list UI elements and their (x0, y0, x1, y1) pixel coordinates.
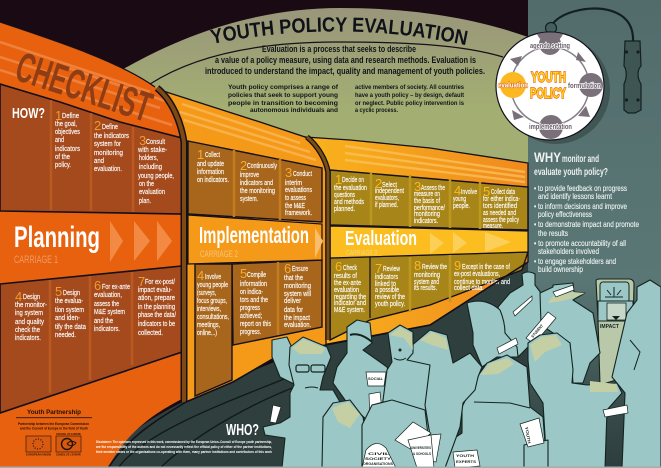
implementation steps lower: online...) (197, 328, 217, 337)
train bottom edge lines (108, 262, 528, 468)
evaluation steps lower: the ex-ante (334, 278, 361, 287)
dome with introduction (124, 8, 528, 162)
evaluation definition (205, 44, 485, 76)
evaluation steps upper: monitoring (414, 209, 440, 218)
implementation steps lower: tors and the (240, 295, 268, 304)
evaluation steps lower: 7 (375, 261, 382, 276)
implementation steps lower: that the (284, 273, 303, 282)
evaluation steps lower: continue to monitor and (454, 277, 510, 286)
youth policy text right column: active members of society. All countries (355, 84, 464, 91)
wire and plug (551, 9, 641, 113)
evaluation steps lower: system and (414, 277, 439, 286)
lower windows (330, 252, 528, 340)
planning steps lower: evaluation, (94, 290, 122, 299)
person: blond man (528, 333, 628, 468)
why panel: WHY (534, 149, 562, 165)
evaluation steps upper: assess the policy (483, 215, 519, 224)
planning steps upper: and (94, 156, 104, 165)
person: woman in boater hat: STUDENT (530, 323, 544, 339)
implementation steps lower: Ensure (292, 264, 308, 273)
person: backpack man (333, 320, 390, 420)
person: front hooded figure with backpack: EXPERTS (456, 459, 476, 464)
divider between carriages 1 and 2 (157, 88, 184, 402)
youth policy centre label: YOUTH (531, 69, 566, 86)
policy cycle diagram (496, 9, 641, 144)
planning steps lower: 6 (94, 278, 101, 293)
evaluation steps upper: tors identified (483, 201, 517, 210)
person: front woman with tote and papers (362, 400, 434, 468)
evaluation steps upper: questions (334, 190, 355, 199)
implementation steps upper: on indicators. (197, 175, 229, 184)
person: backpack man: SOCIAL (368, 376, 384, 381)
planning steps lower: assess the (94, 299, 119, 308)
youth policy text left column: policies that seek to support young (228, 92, 338, 99)
evaluation steps lower: collect data. (454, 283, 484, 292)
youth policy text left column (228, 84, 339, 114)
evaluation steps lower: 9 (454, 258, 461, 273)
evaluation steps lower: results of (334, 271, 358, 280)
evaluation steps upper: measure. (483, 221, 503, 230)
node: agenda setting (530, 32, 570, 55)
implementation steps upper: Continuously (247, 161, 277, 170)
implementation steps lower: achieved; (240, 311, 262, 320)
planning steps upper: Consult (146, 137, 166, 146)
person: standing man with cap (498, 272, 542, 357)
lower windows (232, 260, 322, 345)
implementation steps upper: 1 (197, 147, 204, 162)
why panel (534, 149, 639, 274)
planning steps lower: M&E system (94, 307, 125, 316)
planning steps lower: 7 (138, 274, 145, 289)
youth policy text right column: or neglect. Public policy intervention is (355, 100, 464, 107)
planning steps upper: holders, (139, 153, 158, 162)
evaluation steps upper: independent (375, 186, 405, 195)
evaluation steps upper: 5 (483, 184, 490, 199)
evaluation steps upper: Decide on (342, 175, 364, 184)
person: front woman with tote and papers: & SCHOOLS (413, 451, 431, 456)
implementation steps lower: interviews, (197, 304, 221, 313)
implementation steps lower: report on this (240, 319, 271, 328)
evaluation steps lower: evaluation (334, 285, 359, 294)
evaluation steps lower: indicators (375, 272, 398, 281)
implementation steps lower: monitoring (284, 281, 311, 290)
implementation steps lower: consultations, (197, 312, 229, 321)
disclaimer: Disclaimer: The opinions expressed in this work, commissioned by the European Union–Council of Europe youth partnership, (96, 440, 272, 444)
person: front woman with tote and papers: SOCIETY (365, 456, 391, 461)
ticket machine: IMPACT (600, 324, 619, 330)
planning steps lower: ation, prepare (138, 293, 175, 302)
implementation steps lower: focus groups, (197, 296, 227, 305)
planning steps lower: check the (15, 325, 40, 334)
evaluation definition: introduced to understand the impact, quality and management of youth policies. (205, 66, 485, 76)
implementation steps lower: young people (197, 280, 228, 289)
node: evaluation: evaluation (498, 80, 528, 90)
evaluation steps lower (334, 258, 511, 314)
planning steps lower: ing system (15, 308, 43, 317)
evaluation steps upper: Select (382, 180, 398, 189)
implementation steps lower: data for (284, 305, 303, 314)
planning steps upper: on the (139, 179, 154, 188)
planning steps upper: evaluation. (94, 164, 122, 173)
implementation steps upper: evaluations (285, 185, 312, 194)
how label: HOW? (12, 105, 45, 122)
person: foreground back of head (322, 400, 367, 468)
why panel: monitor and (562, 154, 599, 165)
planning steps lower: Design (23, 292, 40, 301)
planning steps lower: the monitor- (15, 300, 47, 309)
youth policy text left column: Youth policy comprises a range of (228, 84, 339, 91)
implementation steps upper: Conduct (293, 169, 313, 178)
planning steps lower: collected. (138, 328, 163, 337)
planning steps upper: evaluation (139, 187, 165, 196)
implementation steps lower: Compile (247, 270, 266, 279)
why panel: • to engage stakeholders and (534, 257, 616, 266)
evaluation steps upper: and methods (334, 197, 364, 206)
node: formulation (568, 73, 603, 97)
person: woman in boater hat (526, 283, 600, 383)
planning steps upper: of the (55, 152, 70, 161)
planning steps upper: 2 (94, 118, 101, 133)
planning band heading: CARRIAGE 1 (14, 254, 58, 266)
evaluation definition: a value of a policy measure, using data and research methods. Evaluation is (215, 55, 476, 65)
youth partnership logos: COUNCIL OF EUROPE (56, 432, 81, 436)
implementation steps upper: indicators and (240, 178, 273, 187)
disclaimer: are the responsibility of the authors and do not necessarily reflect the official policy of either of the partner institutions, (96, 445, 272, 449)
youth partnership logos: Partnership between the European Commission (18, 422, 89, 426)
implementation steps upper: to assess (285, 193, 306, 202)
planning steps upper (55, 108, 174, 205)
yellow band with heading (330, 226, 528, 258)
evaluation steps upper: Assess the (421, 183, 445, 192)
planning steps lower: needed. (55, 330, 76, 339)
evaluation steps upper: as needed and (483, 208, 516, 217)
youth policy text left column: people in transition to becoming (228, 100, 338, 107)
why panel: stakeholders involved (538, 247, 599, 256)
implementation steps lower: progress (240, 303, 260, 312)
implementation steps lower: Involve (205, 272, 221, 281)
evaluation steps upper: 3 (414, 179, 421, 194)
planning steps upper: objectives (55, 127, 80, 136)
person: front woman with tote and papers: CIVIL (368, 451, 391, 456)
implementation steps lower: information (240, 279, 267, 288)
upper windows (330, 170, 528, 230)
evaluation steps lower: linked to (375, 279, 396, 288)
evaluation steps upper: Involve (461, 187, 477, 196)
evaluation steps lower: Review (383, 264, 400, 273)
evaluation steps lower: monitoring (414, 270, 440, 279)
implementation steps upper: the M&E (285, 201, 305, 210)
orange band with heading: CARRIAGE 2 (200, 249, 238, 260)
planning steps upper: and (55, 135, 64, 144)
planning steps upper: indicators (55, 144, 80, 153)
evaluation steps lower: 8 (414, 258, 421, 273)
evaluation steps lower: regarding the (334, 292, 366, 301)
implementation steps lower: on indica- (240, 287, 263, 296)
evaluation steps lower: a possible (375, 285, 399, 294)
divider between carriages 2 and 3 (307, 137, 328, 340)
evaluation steps upper (334, 172, 520, 230)
planning steps lower: 5 (55, 284, 62, 299)
planning steps upper: Define (102, 122, 118, 131)
person: far right man (612, 280, 661, 468)
implementation steps upper: Collect (205, 150, 221, 159)
planning steps upper: with stake- (137, 145, 167, 154)
yellow band with heading: Evaluation (345, 228, 417, 250)
who label: WHO? (226, 422, 259, 439)
youth policy text right column: a cyclic process. (355, 107, 398, 114)
youth partnership logos: CONSEIL DE L'EUROPE (56, 452, 81, 456)
person: main man with glasses (263, 337, 345, 468)
evaluation steps upper: measure on (414, 189, 440, 198)
youth policy text left column: autonomous individuals and (250, 107, 338, 114)
planning steps lower: For ex-post/ (145, 277, 176, 286)
title: YOUTH POLICY EVALUATION (210, 17, 468, 45)
planning steps lower: indicators. (15, 333, 41, 342)
planning steps lower: indicators. (94, 324, 120, 333)
planning steps upper: monitoring (94, 148, 123, 157)
evaluation steps upper: evaluators, (375, 193, 399, 202)
checklist heading: CHECKLIST (10, 43, 158, 131)
planning steps lower: impact evalu- (138, 285, 172, 294)
youth policy centre label (530, 69, 566, 102)
evaluation steps lower: youth policy. (375, 299, 405, 308)
evaluation steps upper: young (453, 194, 466, 203)
evaluation steps upper: if planned. (375, 200, 398, 209)
carriage 3: evaluation (305, 137, 528, 345)
evaluation steps upper: Collect data (491, 187, 515, 196)
planning steps upper: 3 (139, 133, 146, 148)
implementation steps upper: improve (240, 170, 259, 179)
why panel: build ownership (538, 265, 583, 274)
evaluation steps lower: indicator and (334, 298, 366, 307)
planning steps lower: tify the data (55, 322, 87, 331)
why panel: and identify lessons learnt (538, 192, 613, 201)
planning steps lower: the evalua- (55, 296, 83, 305)
person: hooded man at right of carriage (467, 301, 518, 367)
planning steps upper: including (139, 162, 162, 171)
node: implementation: implementation (529, 122, 572, 131)
orange band with heading: Implementation (199, 222, 309, 248)
youth policy text right column (355, 84, 465, 114)
why panel: the results (538, 229, 568, 238)
why panel: evaluate youth policy? (534, 167, 608, 178)
evaluation steps upper: 1 (335, 172, 342, 187)
evaluation steps upper: the basis of (414, 196, 441, 205)
implementation steps upper: interim (285, 178, 302, 187)
person: front hooded figure with backpack: YOUTH (456, 453, 474, 458)
carriage 1: planning (0, 22, 184, 468)
evaluation steps upper: for either indica- (483, 194, 520, 203)
upper windows (188, 141, 322, 222)
carriage 2: implementation (160, 90, 326, 402)
implementation steps lower: the impact (284, 313, 311, 322)
planning steps upper: 1 (55, 108, 62, 123)
why panel: • to promote accountability of all (534, 239, 626, 248)
evaluation steps upper: the evaluation (334, 183, 367, 192)
planning steps lower: and the (94, 316, 113, 325)
evaluation steps lower: 6 (335, 259, 342, 274)
evaluation steps lower: Except in the case of (462, 262, 511, 271)
implementation steps lower: 6 (284, 261, 291, 276)
youth partnership logos: Youth Partnership (27, 409, 81, 416)
why panel: • to inform decisions and improve (534, 202, 627, 211)
evaluation steps lower: Review the (422, 262, 447, 271)
youth partnership logos (16, 409, 92, 456)
node: agenda setting: agenda setting (530, 41, 570, 50)
person: front woman with tote and papers: UNIVERSITIES (411, 445, 431, 450)
evaluation steps upper: planned. (334, 204, 355, 213)
planning steps lower (15, 274, 177, 342)
implementation steps lower (197, 261, 311, 337)
planning steps upper: the indicators (94, 131, 129, 140)
implementation steps lower: 5 (240, 266, 247, 281)
planning steps lower: and quality (15, 317, 44, 326)
implementation steps upper: framework. (285, 208, 312, 217)
planning steps lower: indicators to be (138, 319, 175, 328)
planning steps lower: 4 (15, 289, 22, 304)
why panel: • to provide feedback on progress (534, 184, 627, 193)
planning steps upper: Define (62, 111, 79, 120)
implementation steps upper: and update (197, 159, 224, 168)
evaluation steps lower: ex-post evaluations, (454, 269, 500, 278)
planning band heading (14, 221, 172, 266)
planning steps lower: Design (63, 288, 80, 297)
evaluation steps upper: 4 (454, 183, 461, 198)
planning steps upper: system for (94, 139, 121, 148)
slate right panel (528, 0, 661, 468)
planning steps upper: the goal, (55, 119, 77, 128)
implementation steps lower: 4 (197, 268, 204, 283)
evaluation steps upper: performance/ (414, 203, 446, 212)
evaluation steps upper: indicators. (414, 216, 438, 225)
planning steps upper: young people, (138, 171, 174, 180)
planning steps lower: For ex-ante (102, 282, 130, 291)
implementation steps upper: the monitoring (240, 186, 275, 195)
bottom page edge (0, 466, 661, 468)
evaluation steps lower: M&E system. (334, 305, 365, 314)
planning steps upper: plan. (139, 196, 151, 205)
planning band heading: Planning (14, 221, 100, 254)
yellow band with heading: CARRIAGE 3 (346, 248, 377, 257)
youth policy centre label: POLICY (530, 85, 566, 102)
person: front hooded figure with backpack: YOUTH (524, 426, 532, 444)
implementation steps upper: system. (240, 194, 258, 203)
planning steps upper: policy. (55, 160, 71, 169)
evaluation steps lower: its results. (414, 283, 437, 292)
evaluation steps upper: people. (453, 201, 470, 210)
node: evaluation (498, 72, 528, 98)
implementation steps upper (197, 147, 313, 217)
node: formulation: formulation (568, 81, 601, 90)
disclaimer: their member states or the organisations co-operating with them, many partner institutions and contributors of this work (96, 450, 273, 454)
youth partnership logos: EUROPEAN UNION (26, 452, 51, 456)
implementation steps lower: evaluation. (284, 320, 311, 329)
evaluation steps upper: 2 (375, 176, 382, 191)
person: front hooded figure with backpack (433, 355, 548, 468)
implementation steps lower: meetings, (197, 320, 220, 329)
person: centre-left figure (400, 330, 482, 468)
planning steps lower: in the planning (138, 302, 175, 311)
evaluation definition: Evaluation is a process that seeks to describe (262, 44, 416, 54)
implementation steps lower: system will (284, 289, 311, 298)
implementation steps lower: deliver (284, 296, 301, 305)
disclaimer (96, 440, 273, 454)
planning steps lower: phase the data/ (138, 310, 177, 319)
station floor (100, 262, 530, 468)
implementation steps upper: 3 (285, 165, 292, 180)
implementation steps upper: information (197, 167, 224, 176)
evaluation steps lower: review of the (375, 292, 405, 301)
evaluation steps lower: Check (343, 263, 357, 272)
person: smiling woman (380, 325, 430, 437)
upper windows (0, 84, 182, 214)
implementation steps lower: progress. (240, 327, 261, 336)
implementation steps lower: (surveys, (197, 288, 216, 297)
person: front woman with tote and papers: ORGANISATIONS (363, 461, 393, 466)
planning steps lower: and iden- (55, 313, 80, 322)
crowd of people (263, 272, 661, 468)
planning steps lower: tion system (55, 305, 84, 314)
lower windows (0, 266, 182, 413)
ticket machine (596, 279, 634, 385)
implementation steps upper: 2 (240, 158, 247, 173)
node: implementation (529, 115, 572, 139)
person: woman behind main man (272, 337, 296, 385)
orange band with heading (188, 215, 323, 264)
youth partnership logos: and the Council of Europe in the field of Youth (20, 426, 88, 430)
why panel: policy effectiveness (538, 210, 592, 219)
youth policy text right column: have a youth policy – by design, default (355, 92, 465, 99)
